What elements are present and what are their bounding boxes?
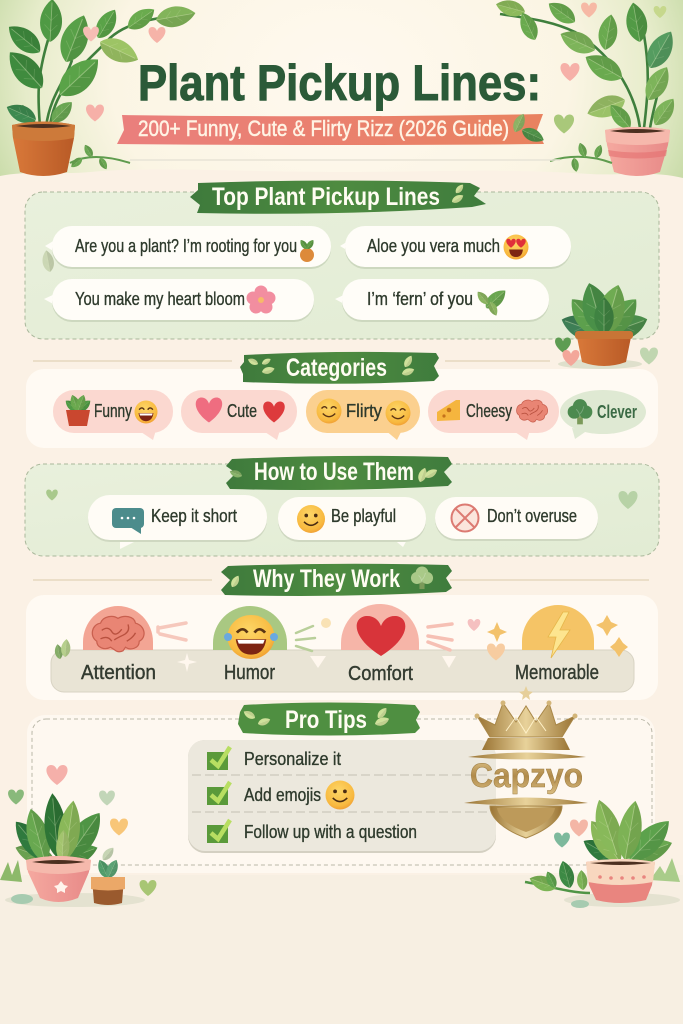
heading: pro tips: Pro Tips — [285, 706, 367, 734]
panel: how to use them — [25, 456, 659, 556]
subtitle ribbon — [117, 112, 546, 146]
icon: blushing face — [386, 400, 410, 426]
section divider: why they work — [33, 579, 649, 581]
bottom background band — [0, 875, 683, 1024]
logo: Capzyo crown and shield — [464, 686, 588, 838]
icon: red heart — [263, 402, 285, 422]
tip row: personalize — [207, 747, 341, 770]
heading: categories: Categories — [286, 354, 387, 382]
category: funny — [53, 390, 173, 440]
speech bubble: rooting — [45, 226, 331, 269]
reason: comfort — [341, 604, 419, 685]
speech bubble: bloom: You make my heart bloom — [75, 289, 245, 309]
tip row: follow up: Follow up with a question — [244, 822, 417, 842]
panel: top plant pickup lines — [25, 180, 659, 339]
icon: pink heart — [196, 398, 222, 422]
category: cheesy: Cheesy — [466, 401, 512, 421]
reason: attention: Attention — [81, 662, 156, 684]
logo: Capzyo crown and shield: Capzyo — [470, 757, 583, 795]
icon: smiley — [297, 505, 325, 533]
reason: comfort: Comfort — [348, 663, 413, 685]
speech bubble: bloom — [44, 279, 314, 322]
speech bubble: aloe — [340, 226, 571, 269]
icon: grinning face — [134, 400, 158, 424]
icon: sprout — [298, 238, 316, 262]
icon: broccoli — [568, 399, 592, 424]
heading: how to use them: How to Use Them — [254, 458, 414, 486]
category: cheesy — [428, 390, 559, 440]
tip row: personalize: Personalize it — [244, 749, 341, 769]
category: clever — [560, 390, 646, 439]
icon: no symbol — [452, 504, 478, 532]
caption bar — [51, 650, 634, 692]
decorative header hearts — [83, 2, 666, 134]
panel plant — [555, 279, 658, 369]
panel: why they work — [26, 564, 658, 700]
category: flirty: Flirty — [346, 401, 382, 421]
decorative sparkles and accents — [54, 615, 628, 672]
speech bubble: rooting: Are you a plant? I’m rooting for you — [75, 236, 297, 256]
panel: pro tips — [27, 702, 655, 873]
top-right potted plant — [494, 0, 680, 176]
tips list — [188, 740, 496, 853]
tip row: add emojis: Add emojis — [244, 785, 321, 805]
reason: memorable: Memorable — [515, 662, 599, 684]
tip row: follow up — [207, 820, 417, 843]
reason: humor — [213, 606, 287, 684]
heading: categories — [240, 352, 439, 384]
category: cute: Cute — [227, 401, 257, 421]
thin header divider — [130, 159, 560, 161]
header background — [0, 0, 683, 178]
icon: smiley — [326, 780, 354, 810]
tip row: add emojis — [207, 780, 354, 810]
speech bubble: fern: I’m ‘fern’ of you — [367, 289, 473, 309]
category: flirty — [306, 390, 420, 440]
subtitle ribbon: 200+ Funny, Cute & Flirty Rizz (2026 Guide) — [138, 116, 509, 141]
category: cute — [181, 390, 297, 440]
icon: blushing face — [316, 398, 342, 424]
tip: don't overuse: Don’t overuse — [487, 506, 577, 526]
tip: keep it short — [88, 495, 267, 549]
icon: fern leaf — [475, 286, 510, 317]
section divider: categories — [33, 360, 550, 362]
heading: top plant pickup lines: Top Plant Pickup Lines — [212, 183, 440, 211]
bubble side leaf — [41, 249, 56, 273]
decorative hearts — [46, 490, 638, 509]
panel: categories — [26, 352, 658, 448]
heading: pro tips — [238, 702, 420, 736]
tip: be playful: Be playful — [331, 506, 396, 526]
icon: heart eyes — [504, 234, 528, 260]
speech bubble: fern — [335, 279, 549, 322]
reason: humor: Humor — [224, 662, 275, 684]
icon: pink flower — [246, 286, 276, 314]
category: clever: Clever — [597, 402, 637, 422]
reason: attention — [81, 606, 156, 684]
icon: cheese — [437, 400, 460, 421]
title: Plant Pickup Lines: — [138, 55, 541, 111]
speech bubble: aloe: Aloe you vera much — [367, 236, 500, 256]
bottom-right plant — [525, 796, 680, 908]
tip: don't overuse — [435, 497, 598, 541]
reason: memorable — [515, 605, 599, 684]
category: funny: Funny — [94, 401, 132, 421]
small pot — [91, 858, 125, 905]
tip: keep it short: Keep it short — [151, 506, 237, 526]
icon: succulent — [63, 394, 93, 426]
icon: chat bubble — [112, 508, 144, 534]
top-left potted plant — [1, 0, 197, 176]
bottom-left plants — [0, 765, 156, 907]
tip: be playful — [278, 497, 426, 547]
heading: how to use them — [226, 456, 452, 490]
icon: brain — [517, 400, 548, 422]
heading: why they work: Why They Work — [253, 565, 400, 593]
